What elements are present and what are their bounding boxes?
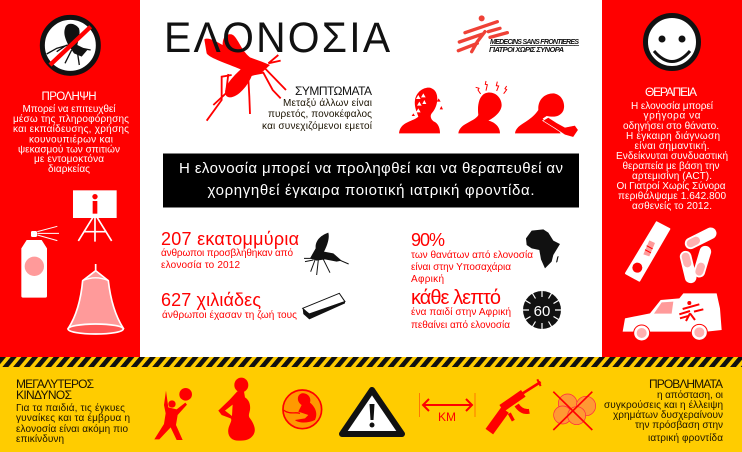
text: greatest risk: ελονοσία είναι ακόμη πιο [16, 423, 128, 435]
text: treatment body: Η έγκαιρη διάγνωση [626, 130, 720, 142]
text: treatment body: ασθενείς το 2012. [632, 200, 712, 212]
icon: fever [399, 88, 443, 133]
panel: greatest risk and problems [0, 367, 742, 452]
icon: coffin [303, 293, 345, 319]
panel: prevention [0, 0, 140, 357]
stat: every minute [411, 287, 511, 331]
text: prevention body: και εκπαίδευσης, χρήσης [13, 123, 129, 135]
icon: mosquito net [68, 264, 123, 334]
hazard stripe [0, 357, 742, 367]
text: prevention body: ψεκασμού των σπιτιών [18, 144, 120, 156]
logo: MSF: MEDECINS SANS FRONTIERES [490, 39, 579, 46]
text: problems: ΠΡΟΒΛΗΜΑΤΑ [649, 377, 723, 391]
text: symptoms: Μεταξύ άλλων είναι [283, 97, 372, 109]
icon: distance in km: ΚΜ [438, 410, 456, 424]
text: problems: ιατρική φροντίδα [648, 432, 723, 444]
icon: ambulance [623, 293, 722, 341]
heading: prevention: ΠΡΟΛΗΨΗ [42, 91, 96, 103]
stat: 627 thousand: άνθρωποι έχασαν τη ζωή τους [162, 309, 297, 321]
icon: spray can [21, 226, 59, 298]
icon: information easel [73, 190, 117, 242]
icon: smiley [646, 16, 698, 68]
stat: 90 percent: 90% [411, 230, 445, 250]
text: problems: την πρόσβαση στην [635, 419, 723, 431]
stat: 627 thousand: 627 χιλιάδες [161, 290, 261, 310]
text: treatment body: οδηγήσει στο θάνατο. [623, 120, 719, 132]
text: greatest risk: επικίνδυνη [16, 433, 64, 445]
icon: rifle [489, 379, 541, 432]
callout: key message [163, 154, 579, 208]
stat: 207 million [161, 229, 299, 271]
text: treatment body: Ενδείκνυται συνδυαστική [616, 150, 728, 162]
callout: key message: χορηγηθεί έγκαιρα ποιοτική ιατρική φροντίδα. [208, 182, 534, 199]
icon: Africa map [526, 229, 560, 268]
panel: treatment [602, 0, 742, 357]
text: treatment body: αρτεμισίνη (ACT). [632, 170, 712, 182]
icon: pregnant woman [218, 378, 255, 441]
stat: 90 percent: Αφρική [411, 273, 444, 285]
stat: every minute: κάθε λεπτό [411, 287, 501, 309]
text: treatment body [616, 100, 728, 212]
stat: every minute: πεθαίνει από ελονοσία [411, 319, 510, 331]
title: ΕΛΟΝΟΣΙΑ [164, 13, 390, 61]
stat: every minute: ένα παιδί στην Αφρική [411, 306, 511, 318]
text: problems: συγκρούσεις και η έλλειψη [604, 399, 723, 411]
stat: 90 percent [411, 230, 533, 285]
text: treatment body: περιθάλψαμε 1.642.800 [618, 190, 726, 202]
text: prevention body: Μπορεί να επιτευχθεί [22, 103, 116, 115]
stat: 627 thousand [161, 290, 297, 321]
text: prevention body: μέσω της πληροφόρησης [13, 113, 129, 125]
text: treatment body: θεραπεία με βάση την [622, 160, 720, 172]
text: symptoms: ΣΥΜΠΤΩΜΑΤΑ [295, 84, 372, 98]
text: symptoms: και συνεχιζόμενοι εμετοί [262, 120, 373, 132]
stat: 207 million: 207 εκατομμύρια [161, 229, 299, 249]
icon: vomiting [515, 93, 578, 137]
logo: MSF [458, 15, 579, 54]
text: greatest risk: ΜΕΓΑΛΥΤΕΡΟΣ [16, 377, 94, 391]
text: treatment body: Οι Γιατροί Χωρίς Σύνορα [616, 180, 726, 192]
logo: MSF: ΓΙΑΤΡΟΙ ΧΩΡΙΣ ΣΥΝΟΡΑ [489, 45, 564, 54]
text: prevention body: κουνουπιέρων και [29, 134, 113, 146]
icon: crossed-out mosquito [42, 17, 98, 73]
icon: crossed-out coins [553, 392, 596, 430]
text: prevention body: με εντομοκτόνα [34, 153, 104, 165]
icon: rapid test [626, 222, 669, 281]
heading: treatment: ΘΕΡΑΠΕΙΑ [645, 85, 697, 99]
text: symptoms [262, 84, 373, 132]
icon: 60 second timer [523, 291, 561, 329]
icon: distance in km [420, 393, 475, 424]
callout: key message: Η ελονοσία μπορεί να προληφθεί και να θεραπευθεί αν [179, 160, 563, 177]
stat: 207 million: ελονοσία το 2012 [161, 259, 240, 271]
icon: black mosquito [304, 233, 349, 275]
text: problems: η απόσταση, οι [657, 389, 723, 401]
text: greatest risk: ΚΙΝΔΥΝΟΣ [16, 388, 72, 402]
text: treatment body: γρήγορα να [644, 110, 701, 122]
icon: 60 second timer: 60 [534, 303, 550, 320]
text: treatment body: είναι σημαντική. [634, 140, 710, 152]
icon: fetus [283, 390, 322, 429]
icon: child with ball [154, 388, 192, 440]
stat: 90 percent: είναι στην Υποσαχάρια [411, 261, 511, 273]
icon: large red mosquito [204, 34, 286, 121]
text: greatest risk: Για τα παιδιά, τις έγκυες [16, 402, 125, 414]
text: prevention body: διαρκείας [48, 163, 90, 175]
text: symptoms: πυρετός, πονοκέφαλος [268, 108, 372, 120]
text: problems [604, 377, 723, 444]
stat: 90 percent: των θανάτων από ελονοσία [411, 249, 533, 261]
text: problems: χρημάτων δυσχεραίνουν [613, 409, 723, 421]
icon: pills [686, 233, 711, 277]
text: treatment body: Η ελονοσία μπορεί [631, 100, 714, 112]
text: greatest risk: γυναίκες και τα έμβρυα η [16, 412, 130, 424]
icon: headache [458, 81, 507, 133]
icon: warning triangle [342, 390, 402, 434]
stat: 207 million: άνθρωποι προσβλήθηκαν από [161, 247, 293, 259]
text: greatest risk [16, 377, 130, 445]
text: prevention body [13, 103, 129, 175]
